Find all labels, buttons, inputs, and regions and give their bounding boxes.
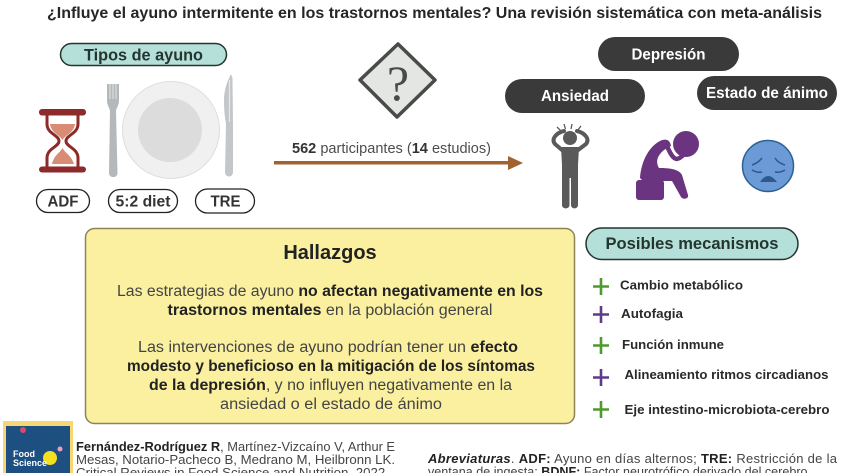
mechanism: autofagia: Autofagia: [621, 306, 684, 321]
citation: Mesas, Notario-Pacheco B, Medrano M, Heilbronn LK.: [76, 452, 395, 467]
finding: depresión: de la depresión, y no influyen negativamente en la: [149, 377, 512, 394]
mechanism: eje intestino-microbiota-cerebro: Eje intestino-microbiota-cerebro: [624, 402, 830, 417]
heading: posibles mecanismos: Posibles mecanismos: [606, 234, 778, 253]
icon: depressed person: [636, 131, 699, 200]
label: estado de ánimo: Estado de ánimo: [706, 85, 828, 102]
icon: plate: [122, 82, 220, 178]
label: ansiedad: [505, 79, 645, 113]
abbreviations: [427, 451, 838, 473]
arrow: [274, 156, 523, 170]
mechanism: función inmune: [593, 337, 724, 354]
journal cover: Food: [13, 449, 35, 459]
mechanism: cambio metabólico: Cambio metabólico: [620, 278, 743, 292]
mechanism: alineamiento ritmos circadianos: Alineamiento ritmos circadianos: [624, 367, 828, 382]
label: 5:2 diet: [108, 190, 178, 212]
label: ADF: ADF: [48, 194, 79, 210]
title: ¿Influye el ayuno intermitente en los trastornos mentales? Una revisión sistemática con meta-análisis: [47, 5, 822, 22]
label: estado de ánimo: [697, 76, 837, 110]
finding: población general: [117, 283, 543, 319]
heading: tipos de ayuno: [60, 44, 226, 66]
mechanism: autofagia: [593, 306, 684, 323]
icon: hourglass: [39, 109, 86, 172]
heading: tipos de ayuno: Tipos de ayuno: [84, 46, 203, 64]
abbreviations: Abreviaturas. ADF: Ayuno en días alternos; TRE: Restricción de la: [427, 451, 838, 466]
mechanism: función inmune: Función inmune: [622, 337, 724, 352]
mechanism: alineamiento ritmos circadianos: [593, 367, 828, 386]
label: depresión: [598, 37, 739, 71]
label: ADF: [36, 190, 90, 212]
citation: [76, 439, 395, 473]
finding: depresión: Las intervenciones de ayuno podrían tener un efecto: [138, 339, 518, 356]
label: ansiedad: Ansiedad: [541, 88, 609, 105]
heading: posibles mecanismos: [586, 228, 798, 260]
finding: depresión: ansiedad o el estado de ánimo: [220, 396, 442, 413]
heading: hallazgos: Hallazgos: [283, 242, 377, 264]
icon: knife: [224, 74, 233, 176]
icon: question diamond: ?: [387, 55, 409, 111]
finding: población general: trastornos mentales en la población general: [168, 302, 493, 319]
text: participantes: 562 participantes (14 estudios): [292, 141, 491, 157]
label: TRE: [196, 189, 254, 213]
panel: hallazgos: [86, 228, 574, 424]
icon: fork: [107, 84, 119, 177]
finding: población general: Las estrategias de ayuno no afectan negativamente en los: [117, 283, 543, 300]
label: depresión: Depresión: [632, 46, 706, 64]
citation: Fernández-Rodríguez R, Martínez-Vizcaíno V, Arthur E: [76, 439, 395, 454]
finding: depresión: modesto y beneficioso en la mitigación de los síntomas: [127, 358, 535, 375]
icon: sad face: [742, 140, 794, 192]
label: TRE: TRE: [210, 194, 241, 210]
journal cover: Science: [13, 458, 47, 468]
icon: anxious person: [554, 124, 587, 208]
journal cover: [3, 421, 73, 473]
mechanism: cambio metabólico: [593, 278, 743, 295]
finding: depresión: [127, 339, 535, 413]
label: 5:2 diet: 5:2 diet: [116, 194, 171, 210]
icon: question diamond: [360, 44, 435, 117]
